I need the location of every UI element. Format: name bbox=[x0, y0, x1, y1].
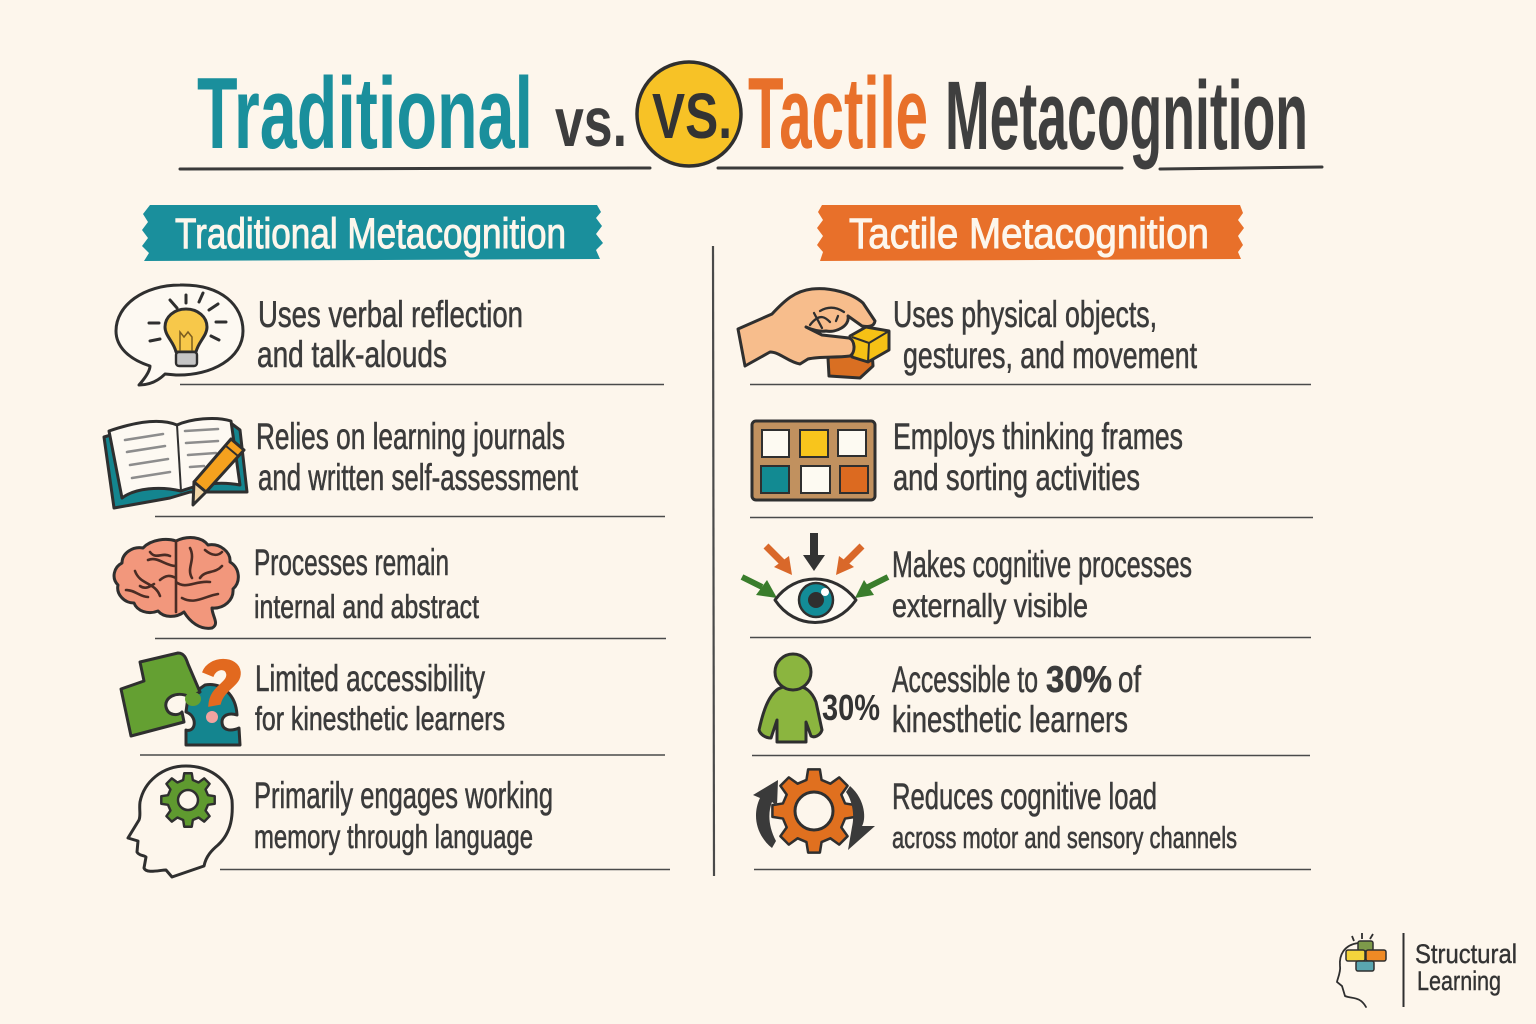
text: internal and abstract: Processes remain bbox=[254, 542, 449, 583]
icon: gear with cycle arrows bbox=[753, 769, 875, 853]
icon: brain bbox=[114, 538, 238, 628]
text: physical objects: gestures, and movement bbox=[903, 335, 1198, 376]
text: externally visible: Makes cognitive processes bbox=[892, 544, 1192, 585]
text: verbal reflection: and talk-alouds bbox=[257, 334, 447, 375]
text: cognitive load: Reduces cognitive load bbox=[892, 776, 1157, 817]
text: limited accessibility: for kinesthetic learners bbox=[255, 700, 505, 737]
text: accessible to 30% bbox=[892, 659, 1142, 740]
badge: vs: VS. bbox=[652, 80, 732, 152]
text: limited accessibility bbox=[255, 658, 505, 737]
logo: structural learning bbox=[1337, 933, 1517, 1007]
icon: eye with converging arrows bbox=[742, 533, 888, 622]
panel: tactile items bbox=[738, 289, 1313, 869]
banner: tactile metacognition: Tactile Metacognition bbox=[849, 210, 1209, 258]
text: working memory: memory through language bbox=[254, 818, 533, 855]
text: verbal reflection bbox=[257, 294, 523, 375]
icon: open book and pencil bbox=[104, 418, 247, 508]
text: externally visible: externally visible bbox=[892, 587, 1088, 624]
logo: structural learning: Structural bbox=[1415, 939, 1517, 969]
logo: structural learning: Learning bbox=[1417, 966, 1501, 996]
text: accessible to 30%: 30% bbox=[1046, 659, 1112, 700]
text: accessible to 30%: of bbox=[1118, 659, 1142, 700]
text: cognitive load bbox=[892, 776, 1237, 855]
text: cognitive load: across motor and sensory channels bbox=[892, 820, 1237, 855]
icon: sorting frame tray bbox=[752, 421, 875, 500]
icon: puzzle pieces with question mark bbox=[121, 653, 240, 745]
text: accessible to 30%: Accessible to bbox=[892, 659, 1038, 700]
banner: traditional metacognition: Traditional Metacognition bbox=[175, 210, 566, 258]
icon: person with 30%: 30% bbox=[822, 687, 880, 728]
text: learning journals: Relies on learning journals bbox=[256, 416, 565, 457]
text: accessible to 30%: kinesthetic learners bbox=[892, 699, 1128, 740]
text: learning journals: and written self-assessment bbox=[258, 457, 578, 498]
panel: traditional items bbox=[104, 285, 670, 877]
badge: vs bbox=[637, 62, 741, 166]
text: thinking frames: and sorting activities bbox=[893, 457, 1140, 498]
icon: hand holding blocks bbox=[738, 289, 889, 378]
icon: speech bubble with light bulb bbox=[116, 285, 243, 385]
icon: person with 30% bbox=[759, 654, 880, 742]
text: physical objects bbox=[893, 294, 1198, 376]
text: limited accessibility: Limited accessibility bbox=[255, 658, 485, 699]
text: internal and abstract: internal and abstract bbox=[254, 588, 479, 625]
icon: head with gear bbox=[128, 766, 232, 877]
text: verbal reflection: Uses verbal reflection bbox=[258, 294, 523, 335]
title: Tactile bbox=[748, 58, 928, 170]
text: thinking frames bbox=[893, 416, 1183, 498]
text: externally visible bbox=[892, 544, 1192, 624]
text: physical objects: Uses physical objects, bbox=[893, 294, 1157, 335]
text: internal and abstract bbox=[254, 542, 479, 625]
text: working memory: Primarily engages working bbox=[254, 775, 553, 816]
title bbox=[197, 58, 1308, 170]
text: working memory bbox=[254, 775, 553, 855]
title: vs. bbox=[555, 83, 627, 161]
text: thinking frames: Employs thinking frames bbox=[893, 416, 1183, 457]
title: Traditional bbox=[197, 58, 533, 170]
text: learning journals bbox=[256, 416, 578, 498]
